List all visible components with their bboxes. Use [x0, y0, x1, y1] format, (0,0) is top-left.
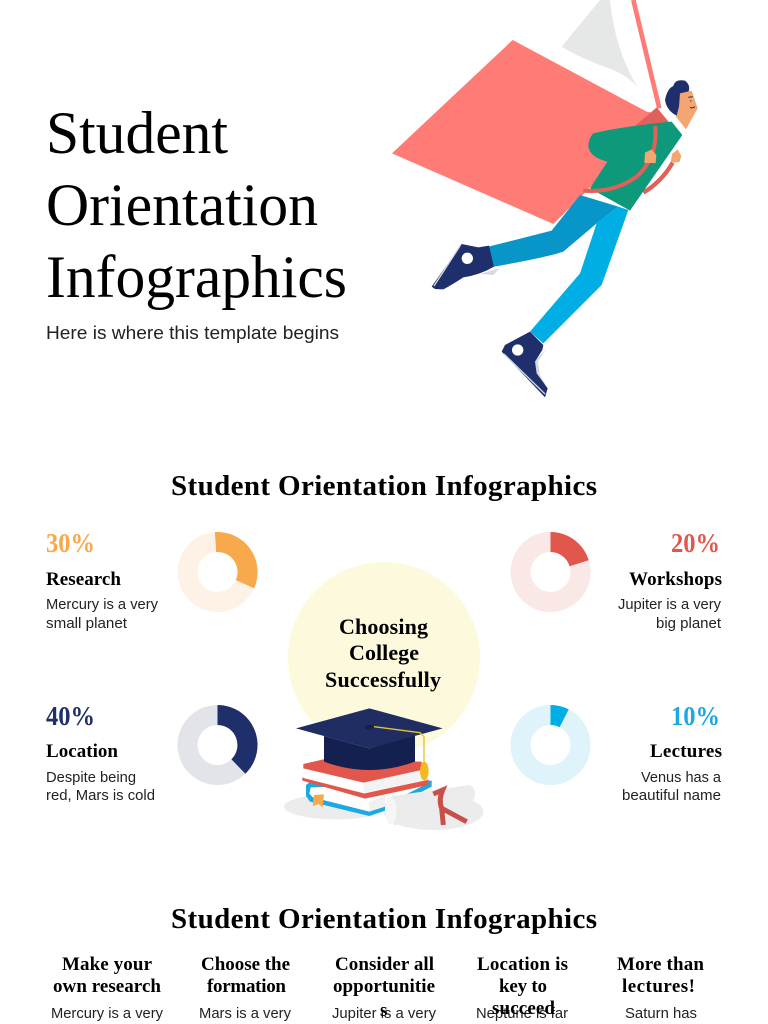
figure: left shoe [432, 244, 494, 289]
shadow: left [284, 794, 389, 819]
book: upper pages [303, 767, 427, 793]
icon: red kite [392, 40, 663, 224]
chart: workshops donut [520, 532, 589, 602]
panel: lectures stat: Venus has a [641, 770, 722, 786]
panel: tip three: opportunitie [333, 976, 435, 997]
figure: right shoe stripe [504, 354, 545, 394]
title [46, 100, 347, 310]
panel: tip four: Neptune is far [476, 1006, 568, 1022]
text: centre label: Choosing [339, 614, 428, 639]
chart: research donut [188, 532, 258, 602]
figure: far hand [671, 149, 681, 162]
icon: bookmark [313, 794, 324, 808]
panel: tip five: Saturn has [625, 1006, 697, 1022]
panel: research stat: 30% [46, 528, 95, 558]
figure: strap behind [643, 163, 673, 193]
panel: location stat: 40% [46, 701, 95, 731]
panel: tip three: Jupiter is a very [332, 1006, 437, 1022]
figure: right shoe badge [512, 344, 523, 356]
panel: lectures stat: beautiful name [622, 788, 721, 804]
panel: lectures stat: Lectures [650, 741, 722, 762]
book: lower blue [306, 781, 432, 816]
panel: tip two: Choose the [201, 954, 290, 975]
diploma: ribbon [433, 790, 467, 825]
figure: right shoe [502, 332, 548, 397]
cap: skull [324, 735, 415, 770]
figure: back leg [488, 195, 618, 267]
text: centre label [325, 614, 441, 692]
panel: tip one: Make your [62, 954, 153, 975]
panel: tip one [51, 954, 164, 1022]
book: lower page side [369, 796, 385, 812]
panel: workshops stat: big planet [656, 616, 721, 632]
panel: tip five [617, 954, 704, 1022]
figure: front leg [530, 207, 628, 343]
panel: tip two: Mars is a very [199, 1006, 292, 1022]
figure: harness strap [583, 126, 655, 191]
panel: location stat [46, 701, 155, 804]
panel: centre circle [288, 562, 480, 754]
figure: green jacket [588, 122, 682, 211]
panel: tip two [199, 954, 292, 1022]
diploma: roll end [385, 797, 396, 825]
title: Infographics [46, 244, 347, 310]
panel: tip one: Mercury is a very [51, 1006, 164, 1022]
chart: lectures donut [520, 705, 580, 775]
subtitle: Here is where this template begins [46, 323, 339, 343]
cap: board [296, 708, 443, 748]
panel: research stat: Mercury is a very [46, 597, 159, 613]
heading: section one: Student Orientation Infographics [171, 470, 597, 502]
panel: tip three [332, 954, 437, 1022]
panel: workshops stat: 20% [671, 528, 720, 558]
panel: tip two: formation [207, 976, 286, 997]
panel: workshops stat: Workshops [629, 569, 722, 590]
title: Orientation [46, 172, 318, 238]
panel: tip four: Location is [477, 954, 568, 975]
illustration: student hanging from kite [392, 0, 698, 397]
figure: hair [665, 80, 689, 116]
icon: kite rope [633, 0, 659, 108]
text: centre label: College [349, 640, 419, 665]
figure: shoe shadow left [480, 268, 499, 275]
panel: tip four: key to [499, 976, 547, 997]
panel: location stat: Location [46, 741, 118, 762]
book: lower pages [309, 784, 427, 812]
figure: shoulder strap [635, 107, 669, 128]
figure: face [676, 91, 698, 129]
shadow: right [383, 793, 483, 830]
icon: graduation cap, books and diploma [284, 708, 483, 830]
panel: tip three: s [380, 1000, 387, 1021]
book: upper lower-cover [302, 777, 428, 799]
figure: near hand [644, 149, 656, 163]
figure: eye and mouth [688, 97, 695, 108]
panel: lectures stat [622, 701, 722, 804]
panel: research stat [46, 528, 159, 632]
panel: tip three: Consider all [335, 954, 434, 975]
panel: tip one: own research [53, 976, 161, 997]
diploma: body [385, 785, 475, 825]
cap: button [365, 725, 374, 730]
panel: tip four [476, 954, 568, 1022]
book: upper cover [303, 759, 422, 783]
book: upper page shade [363, 770, 427, 793]
panel: tip five: lectures! [622, 976, 695, 997]
text: centre label: Successfully [325, 667, 441, 692]
figure: collar [673, 115, 688, 133]
icon: grey kite tail [562, 0, 637, 87]
panel: research stat: Research [46, 569, 121, 590]
panel: workshops stat: Jupiter is a very [618, 597, 722, 613]
cap: tassel cord [374, 727, 424, 762]
figure: shoe shadow right [533, 350, 548, 390]
panel: lectures stat: 10% [671, 701, 720, 731]
panel: location stat: red, Mars is cold [46, 788, 155, 804]
heading: section two: Student Orientation Infographics [171, 903, 597, 935]
figure: left shoe badge [462, 253, 473, 264]
panel: tip four: succeed [492, 998, 555, 1019]
panel: workshops stat [618, 528, 722, 632]
title: Student [46, 100, 228, 166]
panel: research stat: small planet [46, 616, 127, 632]
chart: location donut [188, 705, 258, 775]
figure: left shoe sole stripes [434, 246, 460, 286]
panel: location stat: Despite being [46, 770, 136, 786]
panel: tip five: More than [617, 954, 704, 975]
cap: tassel [420, 762, 429, 780]
